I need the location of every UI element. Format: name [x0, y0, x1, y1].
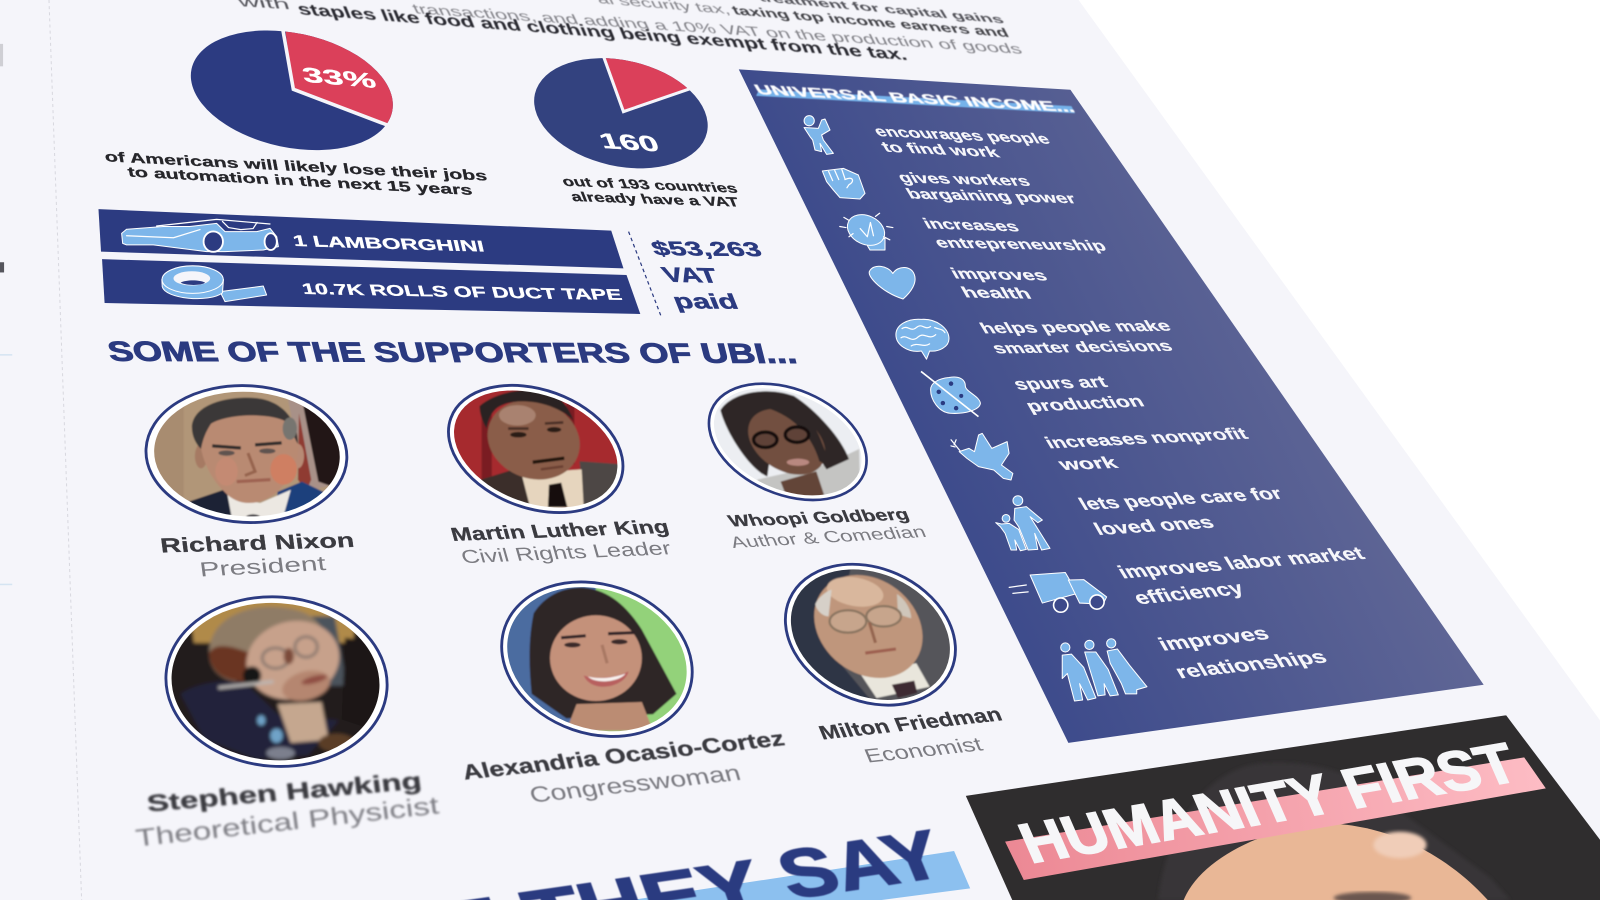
item: nonprofit: work	[1053, 453, 1122, 474]
portrait photo	[790, 569, 950, 700]
item: decisions	[896, 317, 1176, 359]
pie chart: 33 percent	[190, 30, 393, 150]
name: Alexandria Ocasio-Cortez: Congresswoman	[527, 760, 743, 807]
wedge separators	[283, 29, 394, 128]
item: bargaining power	[822, 168, 1080, 207]
heading highlight: what they say	[632, 851, 970, 900]
intro paragraph, cut off at top: staples like food and clothing being exempt from the tax.	[294, 0, 910, 64]
icon: duct tape roll	[162, 266, 267, 302]
heading: supporters: SOME OF THE SUPPORTERS OF UBI...	[104, 336, 800, 370]
item: decisions: helps people make	[976, 317, 1175, 337]
icon: person waving	[804, 116, 833, 154]
icon: palette and brush	[921, 371, 980, 417]
item: relationships: relationships	[1172, 647, 1331, 683]
item: labor market	[1009, 544, 1369, 612]
item: relationships: improves	[1155, 624, 1273, 655]
portrait ring	[431, 362, 641, 535]
name: Stephen Hawking	[134, 768, 441, 853]
panel: universal basic income	[739, 69, 1484, 743]
name: Whoopi Goldberg: Author & Comedian	[727, 522, 929, 552]
icon: light bulb	[840, 209, 893, 251]
item: find work: encourages people	[870, 123, 1053, 147]
name: Richard Nixon: President	[198, 553, 328, 581]
supporter: Martin Luther King	[447, 384, 624, 514]
icon: raised fist	[822, 168, 865, 199]
intro paragraph, cut off at top	[234, 0, 1025, 64]
name: Alexandria Ocasio-Cortez	[460, 727, 787, 807]
item: entrepreneurship: increases	[920, 215, 1022, 235]
item: decisions: smarter decisions	[988, 337, 1176, 357]
item: health: health	[957, 283, 1035, 302]
name: Stephen Hawking: Stephen Hawking	[145, 768, 423, 817]
VAT paid figure	[648, 238, 765, 313]
item: health	[869, 264, 1051, 302]
name: Martin Luther King	[448, 516, 674, 568]
portrait ring	[481, 557, 713, 761]
icon: parent and child	[996, 496, 1050, 551]
name: Whoopi Goldberg: Whoopi Goldberg	[725, 505, 912, 530]
item: bargaining power: bargaining power	[903, 185, 1080, 207]
icon: sports car	[122, 219, 278, 252]
caption: automation	[103, 149, 489, 199]
item: find work: to find work	[878, 139, 1003, 161]
heading: what they say	[222, 816, 955, 900]
wedge separators	[603, 55, 690, 112]
cut-off left margin marks	[0, 44, 12, 585]
item: health: improves	[947, 264, 1051, 284]
item: care: lets people care for	[1075, 484, 1287, 514]
supporter: Richard Nixon	[142, 381, 352, 528]
VAT paid figure: $53,263	[648, 238, 765, 261]
item: find work	[804, 116, 1053, 161]
item: labor market: efficiency	[1130, 579, 1249, 609]
portrait photo	[507, 587, 687, 732]
label: 10.7K ROLLS OF DUCT TAPE	[300, 281, 624, 304]
caption: VAT countries	[560, 175, 742, 210]
name: Martin Luther King: Martin Luther King	[448, 516, 672, 546]
item: nonprofit	[951, 424, 1251, 480]
portrait ring	[691, 361, 884, 523]
caption: automation: of Americans will likely lose their jobs	[103, 149, 489, 185]
caption: automation: to automation in the next 15 years	[126, 165, 474, 199]
name: Milton Friedman: Economist	[861, 734, 986, 767]
red 33 percent wedge	[286, 32, 393, 123]
caption: VAT countries: out of 193 countries	[560, 175, 740, 197]
name: Alexandria Ocasio-Cortez: Alexandria Ocasio-Cortez	[460, 727, 787, 784]
left margin fold line	[49, 0, 82, 900]
33% label: 33%	[300, 63, 378, 93]
VAT paid figure: paid	[669, 290, 742, 313]
item: bargaining power: gives workers	[894, 169, 1034, 189]
portrait ring	[763, 538, 978, 731]
pink highlight band	[1005, 757, 1546, 880]
item: entrepreneurship: entrepreneurship	[931, 234, 1110, 254]
item: art	[921, 371, 1148, 417]
name: Milton Friedman	[816, 704, 1005, 767]
160 label: 160	[595, 128, 663, 156]
portrait photo	[454, 390, 618, 508]
red wedge	[606, 58, 688, 110]
item: nonprofit: increases nonprofit	[1041, 424, 1251, 452]
dark background with portrait	[959, 709, 1600, 900]
supporter: Whoopi Goldberg	[708, 382, 868, 502]
item: care	[996, 484, 1287, 551]
supporter: Milton Friedman	[784, 562, 957, 707]
label: 1 LAMBORGHINI	[291, 233, 486, 256]
name: Stephen Hawking: Theoretical Physicist	[134, 792, 441, 853]
humanity first title: HUMANITY FIRST	[1009, 731, 1527, 875]
portrait photo	[714, 388, 862, 496]
supporter: Stephen Hawking	[160, 589, 393, 774]
name: Richard Nixon: Richard Nixon	[159, 530, 356, 558]
VAT paid figure: VAT	[658, 263, 722, 287]
intro paragraph, cut off at top: taxing top income earners and	[729, 4, 1012, 41]
dashed divider	[629, 232, 661, 315]
item: relationships	[1061, 624, 1331, 701]
icon: brain	[896, 319, 949, 359]
name: Whoopi Goldberg	[725, 505, 929, 552]
item: art: spurs art	[1009, 372, 1111, 393]
bar: Lamborghini	[98, 209, 623, 268]
caption: VAT countries: already have a VAT	[569, 190, 742, 210]
pie chart: 160 of 193	[534, 58, 708, 168]
icon: three people	[1061, 639, 1147, 701]
supporter: Alexandria Ocasio-Cortez	[500, 580, 694, 738]
intro paragraph, cut off at top: transactions, and adding a 10% VAT on the production of goods	[410, 2, 1025, 58]
bar: duct tape	[102, 259, 640, 314]
portrait photo	[172, 602, 380, 760]
icon: heart	[869, 266, 915, 299]
portrait photo	[154, 392, 340, 516]
name: Milton Friedman: Milton Friedman	[816, 704, 1005, 744]
name: Richard Nixon	[159, 530, 356, 581]
icon: dove with branch	[951, 433, 1013, 480]
name: Martin Luther King: Civil Rights Leader	[459, 538, 674, 568]
item: art: production	[1022, 391, 1148, 415]
panel: humanity first	[959, 709, 1600, 900]
portrait ring	[142, 381, 350, 528]
panel heading with highlight: UNIVERSAL BASIC INCOME...	[752, 83, 1078, 116]
item: entrepreneurship	[840, 209, 1110, 254]
panel heading with highlight	[752, 83, 1078, 116]
portrait ring	[160, 589, 393, 774]
item: labor market: improves labor market	[1114, 544, 1369, 583]
icon: moving truck	[1009, 572, 1107, 612]
item: care: loved ones	[1090, 513, 1218, 539]
